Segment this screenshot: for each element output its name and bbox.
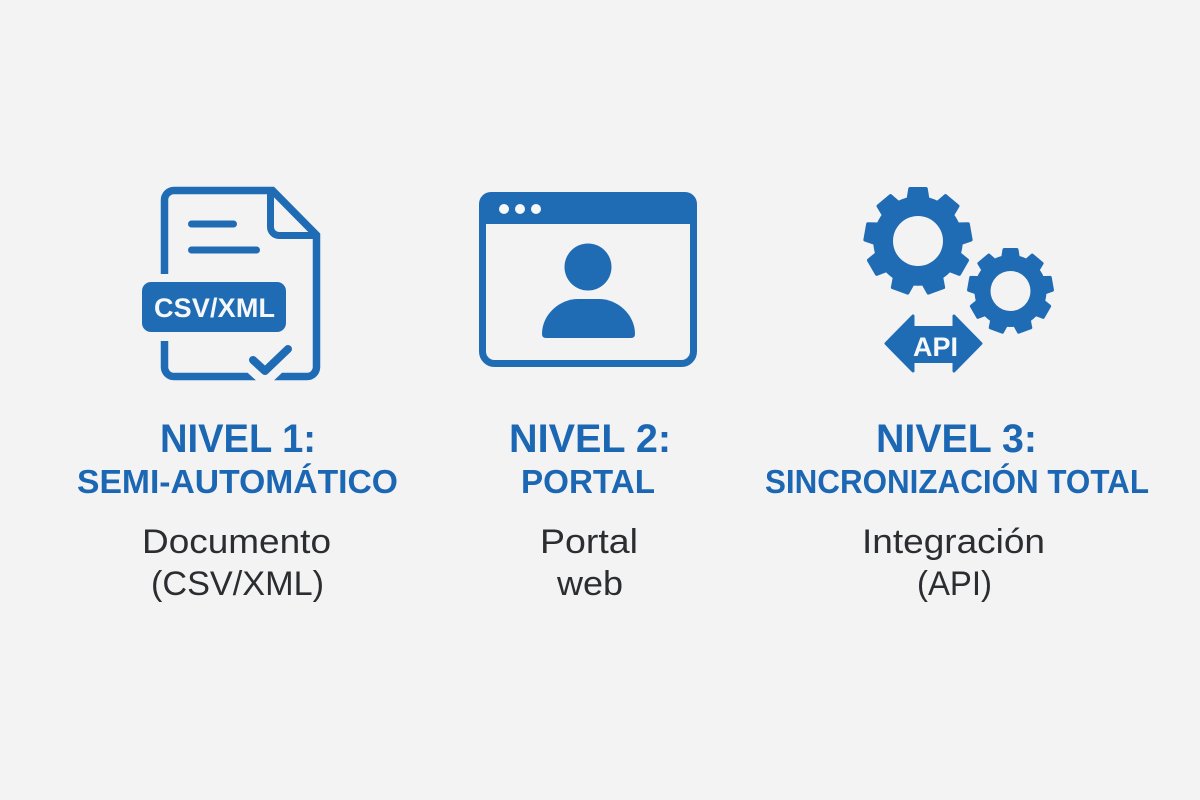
icon: gears and API arrow bbox=[865, 189, 1053, 371]
heading: portal: PORTAL bbox=[521, 463, 655, 500]
icon: gears and API arrow: API bbox=[913, 332, 958, 362]
heading: nivel 3: NIVEL 3: bbox=[876, 417, 1037, 461]
text: integración: Integración bbox=[862, 523, 1045, 561]
icon: browser window with user bbox=[479, 192, 697, 364]
text: documento: Documento bbox=[142, 523, 331, 561]
heading: nivel 1: NIVEL 1: bbox=[160, 417, 316, 461]
text: api: (API) bbox=[917, 565, 992, 603]
text: web: web bbox=[556, 565, 623, 603]
heading: nivel 2: NIVEL 2: bbox=[509, 417, 671, 461]
panel: nivel 3 bbox=[765, 189, 1149, 603]
text: portal: Portal bbox=[540, 523, 638, 561]
panel: nivel 1 bbox=[77, 190, 398, 603]
icon: document CSV/XML bbox=[142, 190, 316, 376]
panel: nivel 2 bbox=[479, 192, 697, 603]
text: csv/xml: (CSV/XML) bbox=[151, 565, 324, 603]
heading: sincronización total: SINCRONIZACIÓN TOTAL bbox=[765, 463, 1149, 500]
icon: document CSV/XML: CSV/XML bbox=[154, 293, 275, 323]
heading: semi-automático: SEMI-AUTOMÁTICO bbox=[77, 463, 398, 500]
